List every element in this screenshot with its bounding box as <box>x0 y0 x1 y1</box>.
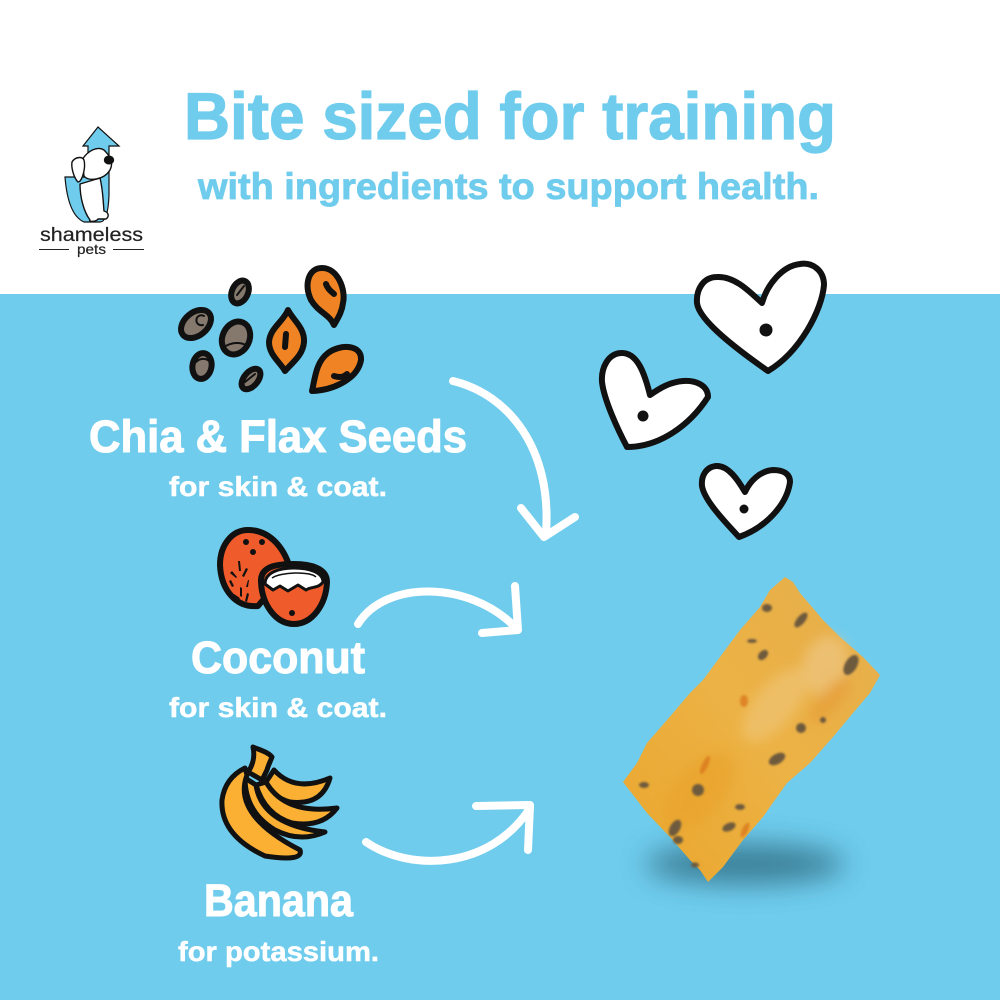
logo rule right <box>113 249 144 250</box>
arrow: banana to treat <box>366 805 530 861</box>
treat shadow <box>645 844 845 884</box>
ingredient heading: chia and flax: Chia & Flax Seeds <box>89 411 467 462</box>
heart medium <box>602 353 708 447</box>
ingredient benefit: skin and coat: for skin & coat. <box>169 471 387 502</box>
ingredient benefit: potassium: for potassium. <box>178 936 379 967</box>
coconut inner rim <box>272 573 316 578</box>
icon: coconut <box>220 530 327 624</box>
chia seed marks <box>196 286 255 382</box>
flax seed marks <box>285 284 347 377</box>
treat orange flecks <box>698 695 751 839</box>
treat: bite sized cracker <box>623 577 880 882</box>
coconut shell dot <box>289 610 295 616</box>
coconut half <box>261 564 327 624</box>
treat texture <box>652 629 857 841</box>
icon: chia and flax seeds <box>176 268 361 393</box>
ingredient benefit: skin and coat: for skin & coat. <box>169 692 387 723</box>
icon: bananas <box>222 747 337 858</box>
stem <box>248 747 272 780</box>
logo wordmark: shameless <box>40 225 143 246</box>
logo arrow and U shape <box>65 127 119 222</box>
logo dog <box>72 148 114 221</box>
logo: shameless pets <box>39 127 144 257</box>
logo rule left <box>39 249 69 250</box>
banana C <box>245 778 325 837</box>
logo sub wordmark: pets <box>77 241 106 257</box>
ingredient heading: coconut: Coconut <box>191 632 365 683</box>
heart small <box>702 466 790 537</box>
coconut flesh <box>265 568 323 591</box>
whole coconut <box>220 530 290 606</box>
subtitle: with ingredients to support health. <box>197 166 819 207</box>
ingredient heading: banana: Banana <box>204 875 354 926</box>
treat seed flecks <box>639 604 862 868</box>
arrow: coconut to treat <box>358 586 518 633</box>
banana A <box>266 770 330 802</box>
blue background panel <box>0 294 1000 1000</box>
coconut dots and marks <box>229 539 265 602</box>
banana D <box>222 768 300 858</box>
title: Bite sized for training <box>184 79 836 153</box>
heart large <box>697 264 824 371</box>
arrow: seeds to treat <box>453 381 575 537</box>
banana B <box>256 782 337 824</box>
chia seeds <box>176 278 264 393</box>
flax seeds <box>269 268 361 391</box>
